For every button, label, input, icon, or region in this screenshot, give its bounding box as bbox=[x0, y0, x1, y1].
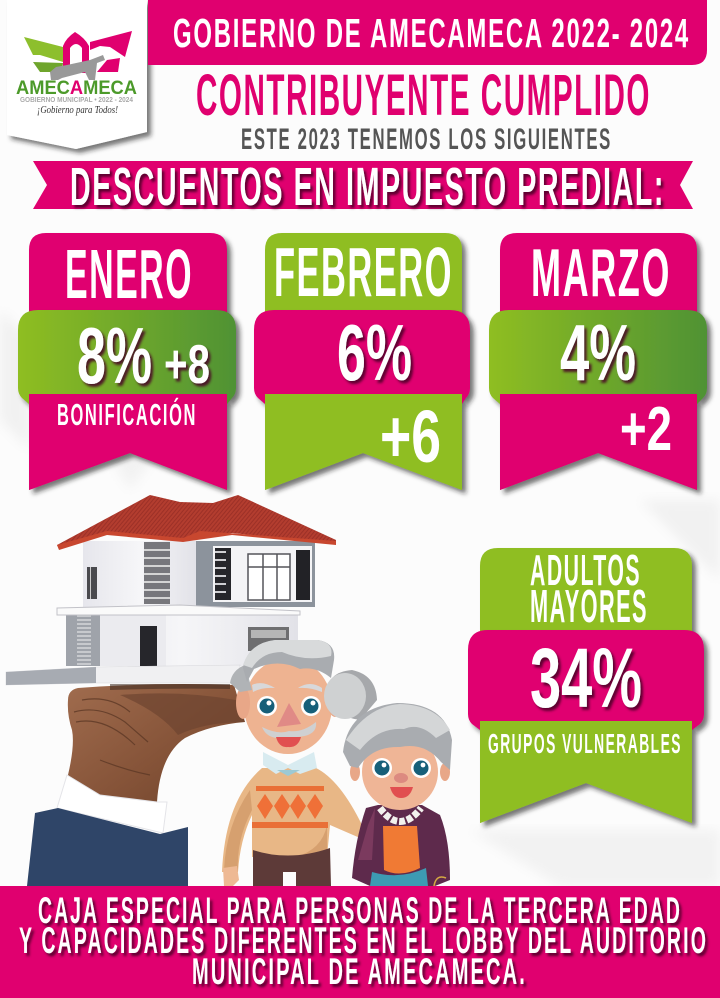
panel: enero bbox=[18, 233, 236, 490]
lower ribbon: febrero bbox=[265, 394, 462, 490]
band: marzo bbox=[489, 310, 707, 404]
band: febrero bbox=[254, 310, 470, 404]
lower ribbon: adultos mayores bbox=[480, 721, 692, 823]
discount: 4%: 4% bbox=[560, 308, 636, 397]
illustration: grandfather bbox=[222, 640, 362, 886]
logo emblem bbox=[24, 31, 132, 80]
illustration: grandmother bbox=[324, 670, 452, 886]
panel: adultos mayores bbox=[468, 546, 704, 823]
suit sleeve bbox=[27, 808, 188, 886]
illustration: house bbox=[6, 495, 336, 685]
panel: enero: ENERO bbox=[65, 235, 193, 313]
band: enero bbox=[18, 310, 236, 404]
panel: febrero bbox=[254, 233, 470, 490]
shirt cuff bbox=[57, 775, 167, 833]
bonus: +8: +8 bbox=[164, 333, 210, 395]
discount: 6%: 6% bbox=[337, 308, 412, 397]
discount: 34%: 34% bbox=[530, 631, 642, 725]
bonus: +2: +2 bbox=[620, 395, 672, 464]
lower ribbon: enero bbox=[29, 394, 227, 490]
illustration: hand bbox=[27, 684, 245, 886]
ribbon heading bbox=[33, 157, 693, 217]
bonus: +6: +6 bbox=[380, 395, 441, 478]
lower ribbon: marzo bbox=[500, 394, 697, 490]
logo slogan: ¡Gobierno para Todos! bbox=[37, 105, 118, 116]
logo subtitle: GOBIERNO MUNICIPAL • 2022 - 2024 bbox=[20, 97, 133, 104]
footer panel bbox=[0, 886, 720, 998]
band: adultos mayores bbox=[468, 630, 704, 730]
logo banner bbox=[7, 0, 147, 149]
discount: 8%: 8% bbox=[77, 311, 152, 400]
note: bonificación: BONIFICACIÓN bbox=[57, 396, 197, 432]
panel: febrero: FEBRERO bbox=[274, 233, 453, 311]
panel: marzo bbox=[489, 233, 707, 490]
header bar bbox=[148, 0, 707, 65]
logo name: AMECAMECA bbox=[16, 78, 137, 99]
